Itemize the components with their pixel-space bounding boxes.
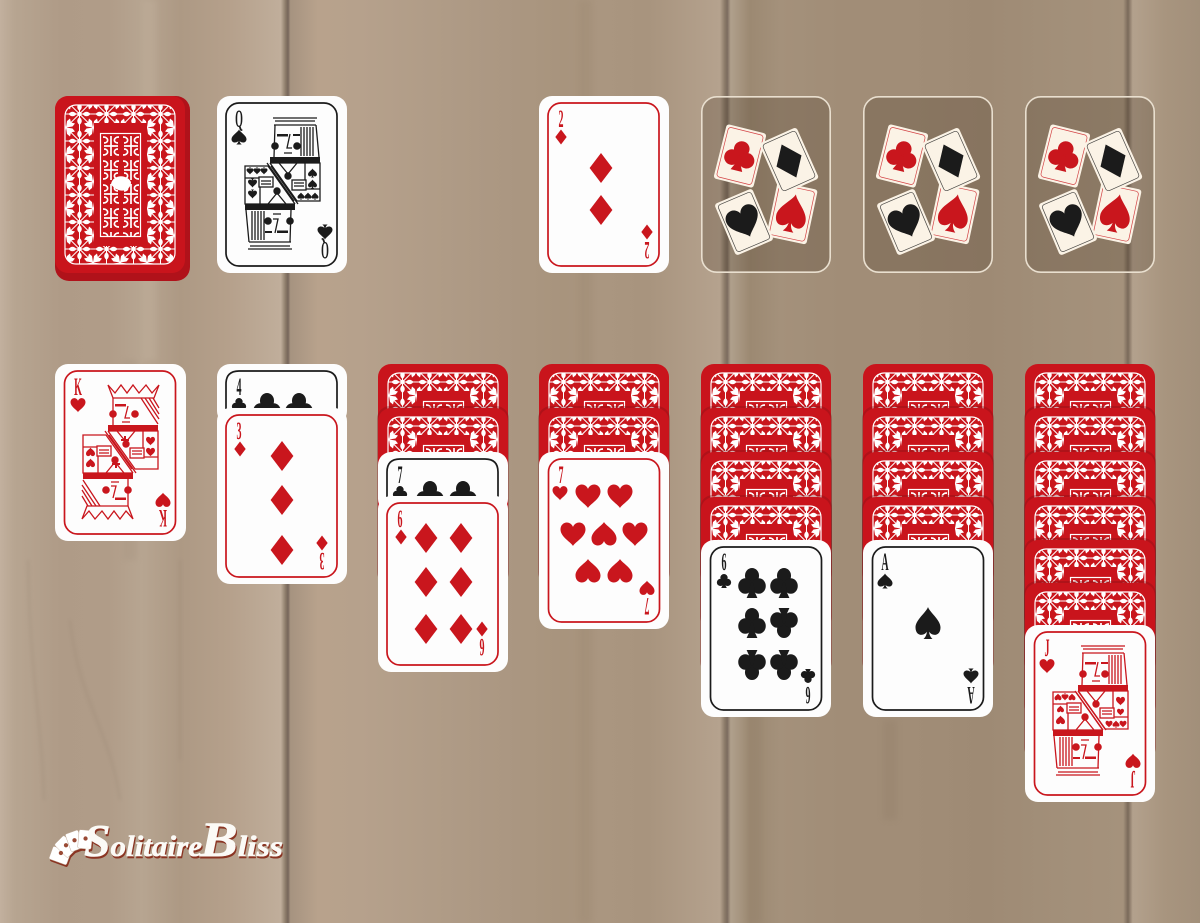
corner index top: 7 [559, 462, 564, 490]
corner index top: A [881, 549, 889, 577]
corner index bottom: 3 [320, 546, 324, 574]
tableau column 7 [1024, 364, 1156, 802]
corner index bottom [964, 668, 978, 708]
corner index top: 2 [559, 106, 563, 134]
seven of clubs: 7 [398, 462, 403, 490]
corner index bottom: 7 [644, 591, 649, 619]
corner index top [555, 106, 567, 144]
icon: fanned cards [49, 830, 93, 865]
face-down cards [862, 364, 994, 674]
corner index bottom [476, 622, 488, 660]
corner index top: K [74, 374, 82, 402]
face-down cards [538, 364, 670, 585]
corner index top: 6 [722, 549, 726, 577]
deck top card back [55, 96, 185, 273]
foundation pile: two of diamonds [539, 96, 669, 273]
corner index top: 3 [237, 418, 241, 446]
four of clubs: 4 [237, 374, 242, 402]
jack of hearts [1025, 625, 1155, 802]
corner index top [234, 418, 246, 456]
tableau column 3 [377, 364, 509, 672]
pips [560, 484, 648, 582]
face-down cards [700, 364, 832, 674]
face-down cards [377, 364, 509, 585]
tableau column 1: king of hearts [55, 364, 186, 541]
pips [415, 523, 472, 644]
seven of hearts [539, 452, 669, 629]
corner index bottom: J [1131, 764, 1135, 792]
pips [738, 568, 798, 680]
suit cards emblem [1037, 124, 1143, 256]
logo text: Solitaire: Solitaire [84, 815, 202, 866]
six of clubs [701, 540, 831, 717]
ace of spades [863, 540, 993, 717]
corner index bottom: A [967, 680, 975, 708]
corner index bottom: 6 [806, 680, 810, 708]
corner index top [878, 549, 892, 588]
corner index top [395, 506, 407, 544]
corner index bottom: 2 [645, 235, 649, 263]
centre pip [916, 607, 940, 639]
logo [49, 811, 283, 867]
corner index bottom: K [159, 503, 167, 531]
seven of clubs [378, 452, 508, 512]
corner index top [717, 549, 731, 588]
court figure [245, 118, 320, 249]
corner index top [1040, 635, 1054, 673]
tableau column 6 [862, 364, 994, 717]
corner index bottom [318, 224, 332, 263]
corner index bottom [640, 581, 654, 619]
face-down cards [1024, 364, 1156, 760]
tableau column 5 [700, 364, 832, 717]
corner index top [70, 374, 86, 412]
corner index top: J [1045, 635, 1049, 663]
six of diamonds [378, 496, 508, 672]
corner index bottom [316, 536, 328, 574]
corner index top [552, 462, 568, 500]
foundation slot 1 [702, 97, 830, 272]
corner index bottom [156, 493, 170, 531]
corner index bottom [1126, 754, 1140, 792]
suit cards emblem [713, 124, 819, 256]
waste card: queen of spades [217, 96, 347, 273]
four of clubs [217, 364, 347, 424]
pips [271, 441, 293, 565]
corner index top: 6 [398, 506, 402, 534]
corner index top [232, 106, 246, 144]
three of diamonds [217, 408, 347, 584]
corner index top: Q [235, 106, 243, 134]
foundation slot 3 [1026, 97, 1154, 272]
court figure [82, 385, 159, 519]
pips [590, 153, 612, 225]
logo text: Bliss: Bliss [199, 811, 283, 867]
tableau column 4 [538, 364, 670, 629]
suit cards emblem [875, 124, 981, 256]
corner index bottom: 6 [480, 632, 484, 660]
stock deck [55, 96, 190, 281]
deck side edges [55, 96, 190, 281]
court figure [1053, 646, 1128, 775]
corner index bottom [641, 224, 653, 263]
corner index bottom [801, 669, 815, 708]
corner index bottom: Q [321, 235, 329, 263]
foundation slot 2 [864, 97, 992, 272]
tableau column 2 [217, 364, 347, 584]
